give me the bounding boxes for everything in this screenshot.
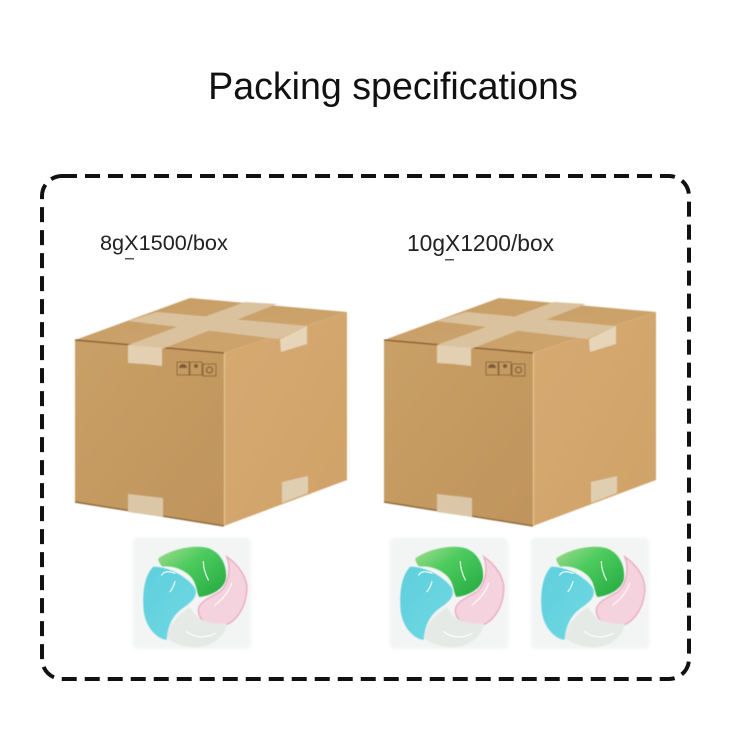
title: Packing specifications: [208, 65, 578, 107]
pod pack: 10g first: [390, 538, 508, 649]
pod pack: 10g second: [531, 538, 649, 649]
small mark under right label: [445, 259, 454, 260]
cardboard box: right: [384, 298, 656, 526]
pod pack: 8g: [133, 538, 251, 649]
cardboard box: left: [75, 298, 347, 526]
dashed panel border: [42, 176, 689, 679]
label: 10g box spec: 10gX1200/box: [407, 230, 555, 256]
label: 8g box spec: 8gX1500/box: [100, 230, 228, 255]
small mark under left label: [125, 258, 134, 260]
